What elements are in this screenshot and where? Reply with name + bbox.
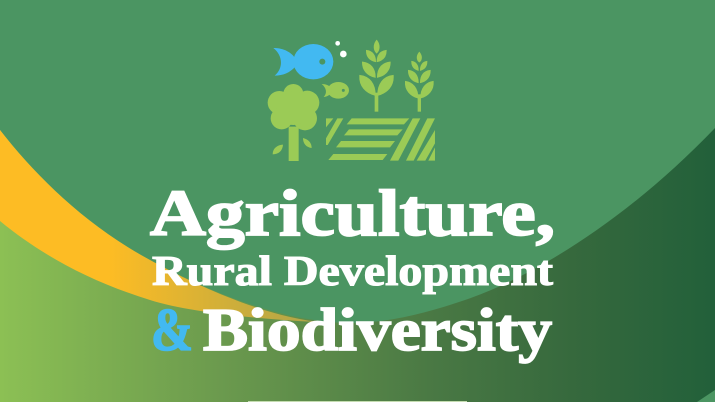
icon: big blue fish: [273, 44, 333, 79]
lower ground gradient: [0, 128, 715, 402]
corner accent: [697, 390, 715, 402]
icon: large wheat: [360, 41, 393, 111]
icon group: fish, wheat, tree, field: [268, 41, 435, 161]
icon: small wheat: [406, 53, 433, 111]
icon: bubbles: [335, 41, 347, 57]
yellow curved band: [0, 130, 325, 322]
bottom white bar: [248, 401, 467, 402]
title: [150, 177, 555, 363]
title line: Agriculture: Agriculture,: [150, 177, 555, 250]
blue ampersand: &: [151, 297, 193, 363]
icon: tree: [268, 84, 319, 161]
icon: tree leaves: [273, 145, 283, 154]
icon: small green fish: [322, 82, 349, 99]
title line: Biodiversity: Biodiversity: [203, 297, 552, 363]
title line: Rural Development: Rural Development: [152, 249, 553, 295]
icon: striped field: [326, 118, 435, 161]
